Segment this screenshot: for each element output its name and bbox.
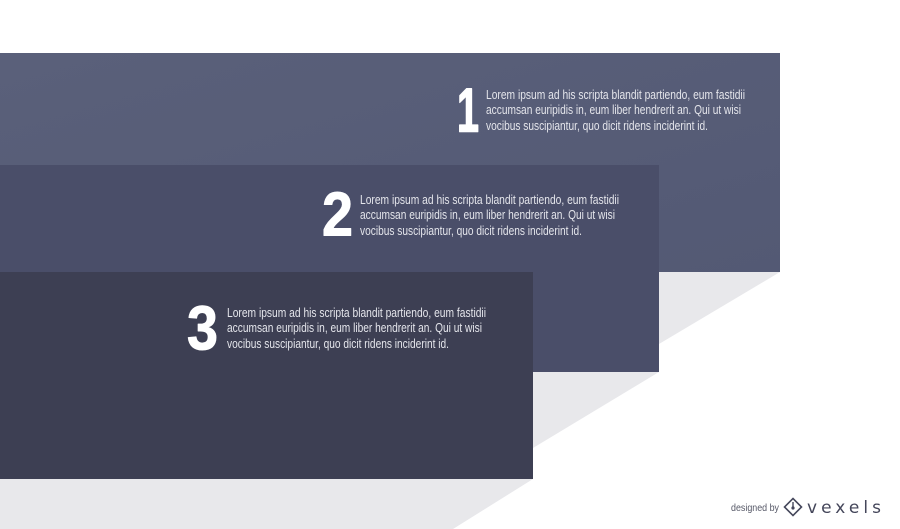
text block 2: accumsan euripidis in, eum liber hendrerit an. Qui ut wisi bbox=[360, 207, 615, 222]
text block 3: Lorem ipsum ad his scripta blandit partiendo, eum fastidii bbox=[227, 305, 486, 320]
number 2: 2 bbox=[322, 180, 353, 250]
watermark: designed by vexels: designed by bbox=[731, 502, 780, 514]
watermark: designed by vexels bbox=[731, 498, 881, 518]
text block 2 bbox=[360, 192, 619, 238]
text block 3: vocibus suscipiantur, quo dicit ridens inciderint id. bbox=[227, 336, 449, 351]
text block 2: Lorem ipsum ad his scripta blandit partiendo, eum fastidii bbox=[360, 192, 619, 207]
number 1: 1 bbox=[457, 76, 479, 146]
panel: step 1 bbox=[0, 53, 780, 272]
panel: step 2 bbox=[0, 165, 659, 372]
shadow: step 1 bbox=[659, 272, 780, 344]
icon: vexels diamond bbox=[785, 499, 801, 515]
text block 1: Lorem ipsum ad his scripta blandit partiendo, eum fastidii bbox=[486, 87, 745, 102]
text block 3: accumsan euripidis in, eum liber hendrerit an. Qui ut wisi bbox=[227, 320, 482, 335]
text block 1: accumsan euripidis in, eum liber hendrerit an. Qui ut wisi bbox=[486, 102, 741, 117]
shadow: step 2 bbox=[533, 372, 659, 448]
number 3: 3 bbox=[187, 294, 218, 364]
panel: step 3 bbox=[0, 272, 533, 479]
text block 2: vocibus suscipiantur, quo dicit ridens inciderint id. bbox=[360, 223, 582, 238]
watermark: designed by vexels: vexels bbox=[807, 498, 881, 518]
text block 1: vocibus suscipiantur, quo dicit ridens inciderint id. bbox=[486, 118, 708, 133]
text block 3 bbox=[227, 305, 486, 351]
shadow: step 3 bbox=[0, 479, 533, 529]
text block 1 bbox=[486, 87, 745, 133]
